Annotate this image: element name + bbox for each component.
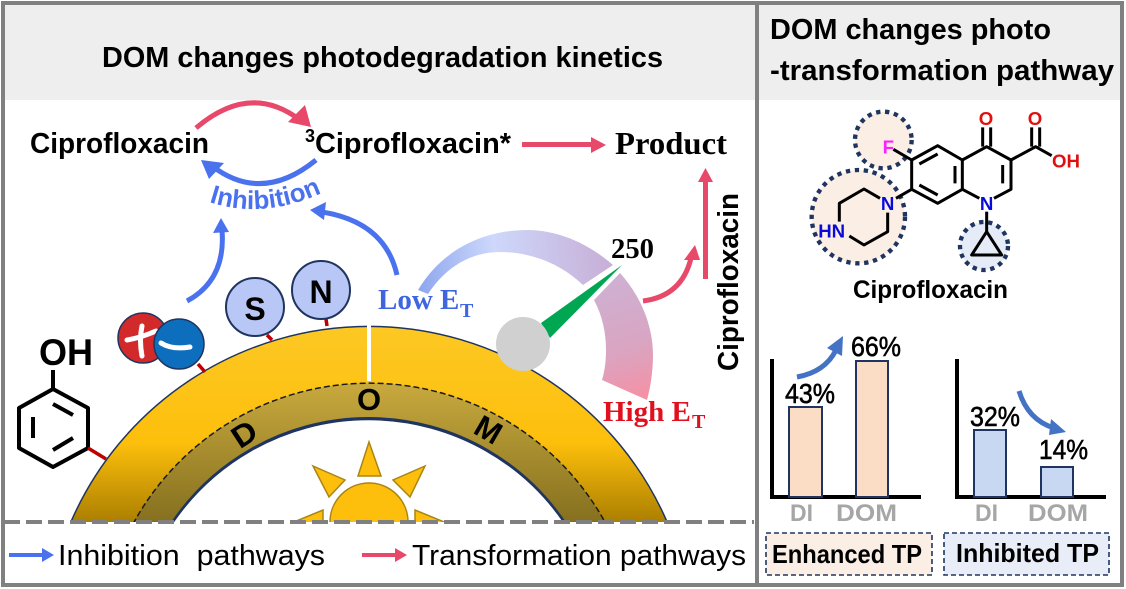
arch: inner dashed boundary <box>133 383 606 524</box>
bonds <box>839 127 1052 255</box>
molecule label: Ciprofloxacin <box>853 276 1008 304</box>
atoms: F <box>883 136 894 157</box>
gauge: high arc <box>594 273 653 400</box>
value: 66%: 66% <box>851 331 901 362</box>
icon: N group: N <box>309 274 333 310</box>
bar: DOM 14% <box>1041 467 1073 497</box>
gauge: Low ET: Low E <box>378 284 459 316</box>
legend: inhibition label: Inhibition pathways <box>58 540 325 572</box>
reaction: Product: Product <box>615 125 727 161</box>
label: O: O <box>357 382 381 417</box>
value: 14%: 14% <box>1039 434 1088 465</box>
arrow: gauge to ciprofloxacin axis <box>643 245 700 301</box>
label: DI: DI <box>790 500 813 527</box>
gauge: hub <box>496 317 550 371</box>
label: DOM: DOM <box>836 500 897 527</box>
bar: DOM 66% <box>856 361 888 497</box>
atoms: O <box>979 108 993 129</box>
arrow: charged groups to inhibition <box>187 218 229 301</box>
heading: pathway: DOM changes photo <box>770 14 1051 46</box>
heading: pathway: -transformation pathway <box>770 55 1114 87</box>
arrow: low ET to inhibition <box>310 202 397 275</box>
heading: kinetics: DOM changes photodegradation kinetics <box>102 42 663 74</box>
heading: pathway <box>770 14 1114 87</box>
icon: phenol molecule: OH <box>39 332 93 373</box>
arrow: vertical to product <box>698 168 713 279</box>
divider tick on arch <box>367 325 371 381</box>
box: Inhibited TP <box>944 533 1109 575</box>
bar: DI 43% <box>789 407 822 497</box>
label: M: M <box>468 408 508 452</box>
reaction: excited Ciprofloxacin: 3 <box>305 126 315 146</box>
arrow: decrease <box>1019 391 1066 435</box>
atoms: HN <box>818 221 845 242</box>
label: DOM: DOM <box>1028 500 1088 527</box>
arrow: increase <box>797 336 843 377</box>
panel: kinetics header band <box>4 4 756 100</box>
icon: phenol molecule <box>19 332 106 467</box>
panel: pathway header band <box>758 4 1121 100</box>
value: 43%: 43% <box>785 378 835 409</box>
label: D: D <box>225 413 264 455</box>
gauge: High ET: High E <box>603 396 691 428</box>
panel: DOM arch and sun <box>71 326 667 522</box>
icon: sun <box>296 440 444 522</box>
divider: dashed baseline <box>4 520 754 524</box>
highlight: fluorine <box>855 112 912 168</box>
icon: S group <box>226 278 284 340</box>
label: Inhibition: Inhibition <box>210 182 320 210</box>
reaction: Ciprofloxacin: Ciprofloxacin <box>30 128 209 160</box>
arch: outer ring <box>70 326 668 524</box>
gauge <box>378 230 706 433</box>
gauge: Low ET: T <box>460 300 474 322</box>
legend: transformation arrow <box>362 548 407 562</box>
gauge: value: 250 <box>611 233 654 265</box>
atoms: N <box>881 193 894 214</box>
atoms: O <box>1028 108 1042 129</box>
box: Enhanced TP <box>766 533 932 575</box>
legend <box>9 540 746 572</box>
icon: S group: S <box>244 291 266 327</box>
arrow: to product <box>522 137 606 153</box>
axes <box>772 359 921 497</box>
gauge: High ET: T <box>692 411 706 433</box>
bar: DI 32% <box>974 430 1006 497</box>
legend: transformation label: Transformation pathways <box>412 540 746 572</box>
arch: inner edge <box>171 418 566 524</box>
box: Inhibited TP: Inhibited TP <box>956 538 1099 568</box>
gauge: low-mid arc <box>418 230 613 294</box>
arrow: excitation <box>196 103 311 128</box>
icon: N group <box>292 261 350 326</box>
highlight: piperazine <box>812 170 905 263</box>
icon: charged groups <box>118 313 205 372</box>
atoms: N <box>980 193 993 214</box>
axes <box>957 359 1106 497</box>
gauge: needle <box>541 265 622 338</box>
highlight: cyclopropane <box>960 222 1008 270</box>
reaction: excited Ciprofloxacin: Ciprofloxacin* <box>315 128 512 160</box>
box: Enhanced TP: Enhanced TP <box>772 539 922 569</box>
chart: inhibited TP <box>957 359 1106 527</box>
atoms <box>818 108 1080 242</box>
atoms: OH <box>1052 150 1080 171</box>
chart: enhanced TP <box>772 331 921 527</box>
label: DI: DI <box>975 500 998 527</box>
value: 32%: 32% <box>970 401 1020 432</box>
label: vertical Ciprofloxacin: Ciprofloxacin <box>713 193 745 371</box>
arch: inner band <box>133 383 606 524</box>
molecule: ciprofloxacin structure <box>812 108 1080 270</box>
arrow: relaxation <box>201 160 316 184</box>
legend: inhibition arrow <box>9 548 54 562</box>
